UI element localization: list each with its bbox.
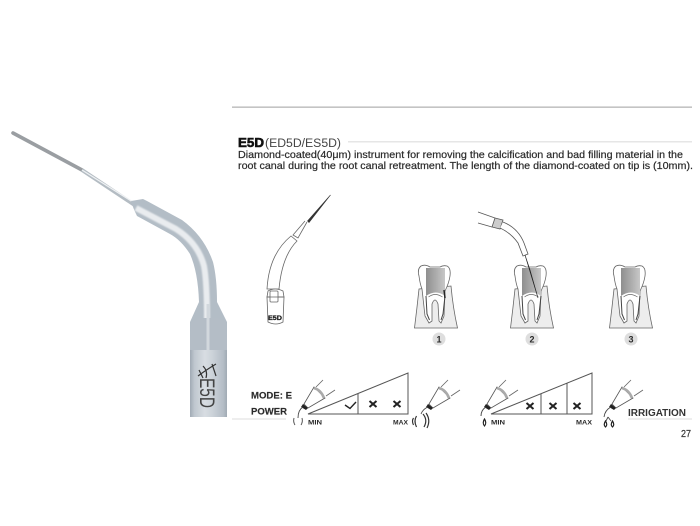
- icon: high irrigation handpiece: [604, 380, 643, 427]
- irrigation underline: [628, 418, 692, 420]
- power chart: MAX: [393, 420, 409, 426]
- label: mode and power: [251, 390, 292, 416]
- description text: root canal during the root canal retreatment. The length of the diamond-coated on tip is (10mm).: [238, 161, 693, 172]
- step number 1: 1: [436, 334, 442, 344]
- description text: Diamond-coated(40μm) instrument for removing the calcification and bad filling material in the: [238, 150, 683, 161]
- curved body: [131, 199, 227, 350]
- cylindrical base: [190, 350, 227, 417]
- step number 3: 3: [628, 334, 634, 344]
- irrigation chart: [491, 373, 593, 426]
- irrigation chart: MIN: [491, 420, 505, 426]
- label: irrigation: IRRIGATION: [628, 408, 686, 419]
- power chart: MIN: [308, 420, 322, 426]
- heading: model name: E5D: [238, 135, 264, 150]
- main photo: E5D scaler tip: [13, 133, 227, 417]
- check mark: [345, 402, 356, 408]
- irrigation chart: MAX: [576, 420, 593, 426]
- step number 2: 2: [529, 334, 535, 344]
- engraved model label: E5D: [195, 378, 218, 408]
- label: mode and power: MODE: E: [251, 390, 292, 400]
- engraved logo: [198, 364, 216, 378]
- power label underline: [232, 418, 286, 420]
- body highlight: [136, 208, 207, 320]
- flat facet on base: [190, 318, 227, 350]
- icon: low power handpiece: [294, 380, 335, 425]
- heading: model name: (ED5D/ES5D): [265, 138, 341, 150]
- thin shaft: [82, 170, 136, 206]
- top divider: [232, 106, 692, 108]
- cross marks: [526, 403, 580, 409]
- tooth step 1: [414, 265, 458, 346]
- page number: 27: [681, 429, 691, 440]
- engraved label: E5D: [268, 315, 282, 322]
- instrument: [478, 212, 538, 298]
- heading: model name: [238, 135, 341, 150]
- label: mode and power: POWER: [251, 406, 288, 416]
- line drawing: E5D tip: [267, 195, 330, 324]
- description text: [238, 150, 693, 172]
- icon: high power handpiece: [412, 380, 460, 428]
- power chart: [308, 373, 409, 426]
- tooth step 2 with instrument: [478, 212, 554, 346]
- tooth step 3: [610, 265, 652, 346]
- cross marks: [370, 401, 400, 407]
- diamond-coated tip shaft: [13, 133, 82, 170]
- icon: low irrigation handpiece: [481, 380, 518, 426]
- heading divider: [348, 141, 692, 142]
